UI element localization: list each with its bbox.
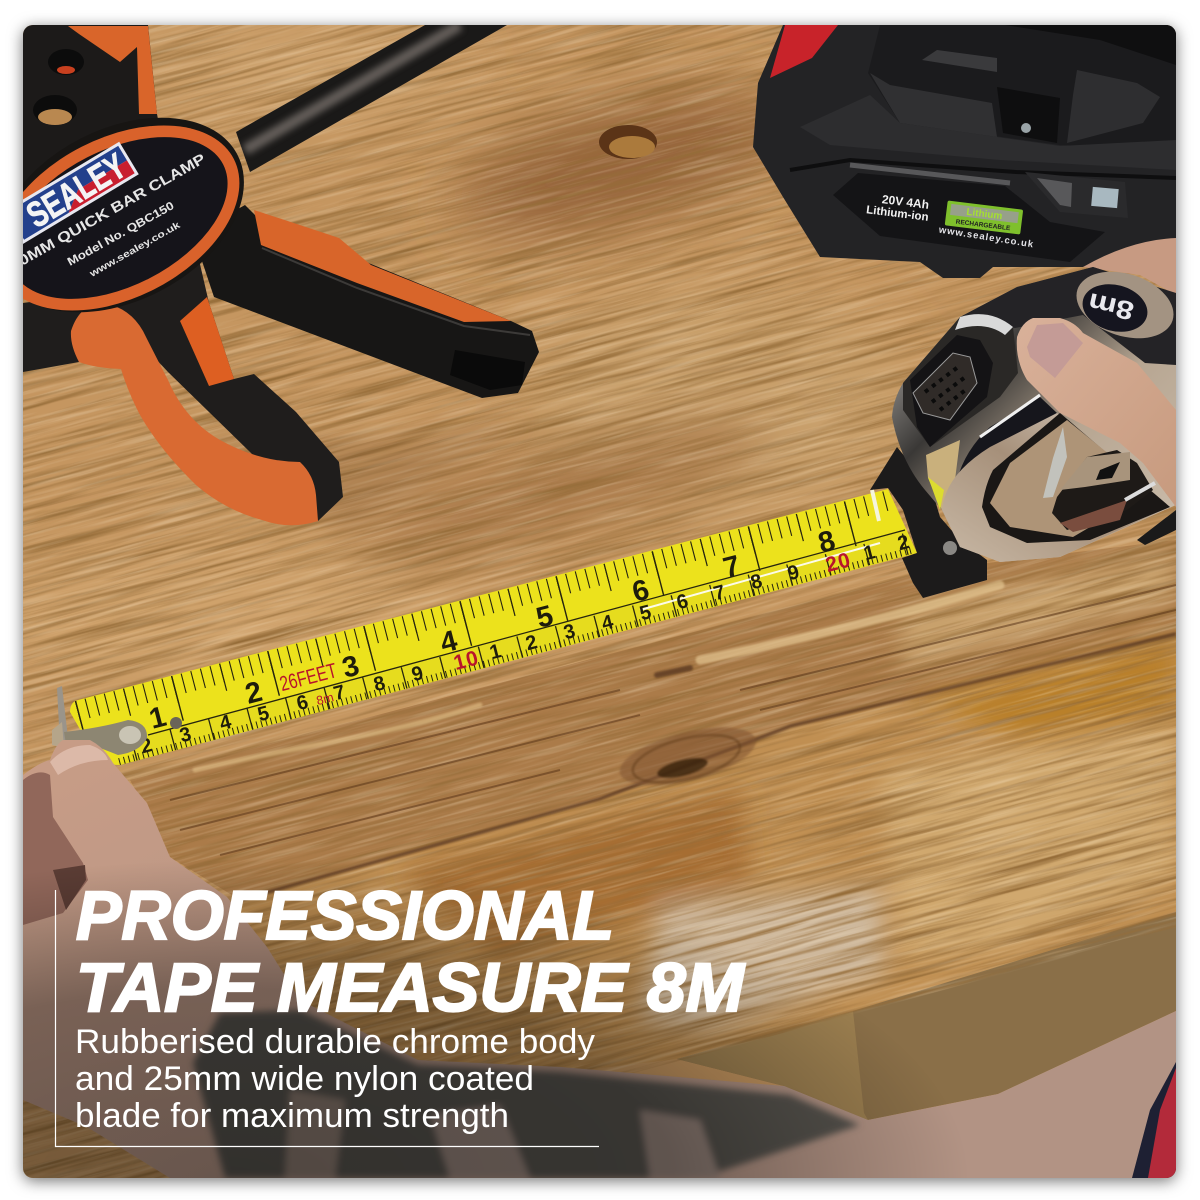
heading [76, 877, 746, 1026]
text frame corner line [56, 890, 599, 1146]
lithium badge [945, 200, 1023, 235]
headline and copy [75, 877, 746, 1135]
front black nose [870, 447, 987, 598]
grip lock button [903, 314, 1018, 447]
battery voltage text [866, 195, 928, 221]
centimetre numbers: 3 [339, 650, 363, 685]
8m badge [1068, 260, 1182, 350]
battery voltage text: 20V 4Ah [881, 192, 930, 212]
chrome collar [955, 314, 1013, 335]
disc reflections [1052, 450, 1153, 530]
tape measure housing [870, 238, 1182, 598]
centimetre numbers: 7 [720, 550, 744, 585]
clamp label oval [23, 118, 244, 312]
red sleeve [1132, 1062, 1176, 1178]
black top shell [960, 267, 1176, 365]
hand behind housing [1083, 238, 1176, 295]
upper board [130, 540, 1176, 900]
inch numbers: 9 [785, 561, 802, 585]
description: Rubberised durable chrome body [75, 1023, 595, 1061]
rear clamp jaw [23, 25, 160, 190]
forefinger [23, 772, 88, 925]
chrome outer ring [942, 413, 1170, 562]
8m badge: 8m [1085, 287, 1137, 327]
inch numbers: 2 [138, 734, 155, 758]
black ring [982, 413, 1170, 543]
grip dot panel [913, 353, 977, 420]
inch numbers: 5 [637, 601, 654, 625]
battery pack [753, 25, 1176, 278]
clamp label text: 0MM QUICK BAR CLAMP [16, 151, 209, 269]
wood shadow under clamp [225, 425, 502, 528]
chrome shell [892, 267, 1176, 562]
inch numbers: 2 [895, 531, 912, 555]
battery voltage text: Lithium-ion [866, 204, 929, 224]
inch numbers: 7 [711, 581, 728, 605]
pale grain swirls [195, 585, 1000, 770]
reflective sliver [926, 440, 960, 510]
inch numbers: 1 [487, 640, 504, 664]
grain streaks on upper board [170, 585, 1176, 855]
red markings: 8m [315, 690, 335, 708]
glare on blade [640, 543, 880, 610]
inch numbers: 6 [294, 691, 311, 715]
heading: TAPE MEASURE 8M [76, 949, 746, 1026]
quick bar clamp [0, 25, 539, 525]
centimetre numbers: 6 [629, 574, 653, 609]
inch numbers: 7 [331, 681, 348, 705]
inch numbers: 3 [561, 620, 578, 644]
hand holding tape hook [23, 740, 1176, 1178]
upper handle [193, 205, 539, 398]
description [75, 1023, 595, 1135]
lower handle orange grip [71, 303, 318, 525]
clamp label text [23, 154, 203, 276]
lithium badge: Lithium [966, 207, 1003, 222]
description: and 25mm wide nylon coated [75, 1060, 534, 1098]
board groove [240, 634, 1176, 900]
thumb nail [1027, 323, 1083, 378]
belt clip [1043, 427, 1067, 498]
inch numbers: 4 [217, 711, 234, 735]
sealey logo: SEALEY [19, 145, 133, 236]
blade yellow strip [70, 489, 917, 765]
inch numbers [138, 531, 912, 758]
dark chrome band [957, 397, 1057, 485]
orange trigger [180, 297, 234, 386]
battery screw [1021, 123, 1031, 133]
inch numbers: 5 [255, 702, 272, 726]
red markings: 10 [451, 646, 482, 675]
centimetre numbers [146, 525, 839, 736]
inner disc [990, 420, 1153, 537]
tape end hook [52, 686, 182, 755]
inch numbers: 9 [409, 662, 426, 686]
finger gap [53, 865, 86, 910]
centimetre numbers: 5 [533, 600, 557, 635]
rear black foot [1137, 510, 1176, 545]
battery charge indicator [1025, 172, 1119, 208]
battery body [753, 25, 1176, 278]
battery label plate [833, 173, 1105, 262]
screw [943, 541, 957, 555]
tattoo [193, 1010, 860, 1178]
divider line [148, 530, 905, 735]
red markings: 20 [823, 548, 854, 577]
dark text backdrop [23, 860, 983, 1178]
hand and forearm skin [23, 740, 1176, 1178]
inch numbers: 1 [861, 541, 878, 565]
sealey logo [23, 142, 139, 244]
inch numbers: 8 [371, 672, 388, 696]
inch numbers: 8 [748, 570, 765, 594]
inch numbers: 6 [674, 590, 691, 614]
inch numbers: 3 [177, 723, 194, 747]
centimetre graduations [77, 499, 896, 724]
centimetre numbers: 2 [242, 676, 266, 711]
lithium badge: RECHARGEABLE [955, 219, 1011, 232]
description: blade for maximum strength [75, 1097, 509, 1135]
red markings [277, 548, 854, 708]
bench front face [677, 912, 1176, 1120]
clamp base black [23, 264, 343, 521]
inch numbers: 2 [523, 631, 540, 655]
centimetre numbers: 8 [815, 525, 839, 560]
bench hole [599, 125, 657, 159]
wood knot [619, 727, 756, 786]
centimetre numbers: 4 [437, 625, 461, 660]
inch graduations [117, 543, 913, 762]
battery web address: www.sealey.co.uk [937, 224, 1035, 250]
clamp label text: www.sealey.co.uk [87, 219, 183, 280]
inch numbers: 4 [599, 611, 616, 635]
heading: PROFESSIONAL [76, 877, 614, 954]
battery red accent [770, 25, 838, 78]
tape blade [52, 489, 917, 765]
thumb nail [50, 745, 108, 775]
clamp bar [236, 25, 507, 172]
centimetre numbers: 1 [146, 701, 170, 736]
lower board [241, 640, 1176, 1068]
thumb on housing [1017, 318, 1176, 507]
clamp label text: Model No. QBC150 [66, 200, 176, 269]
red markings: 26FEET [277, 659, 339, 696]
